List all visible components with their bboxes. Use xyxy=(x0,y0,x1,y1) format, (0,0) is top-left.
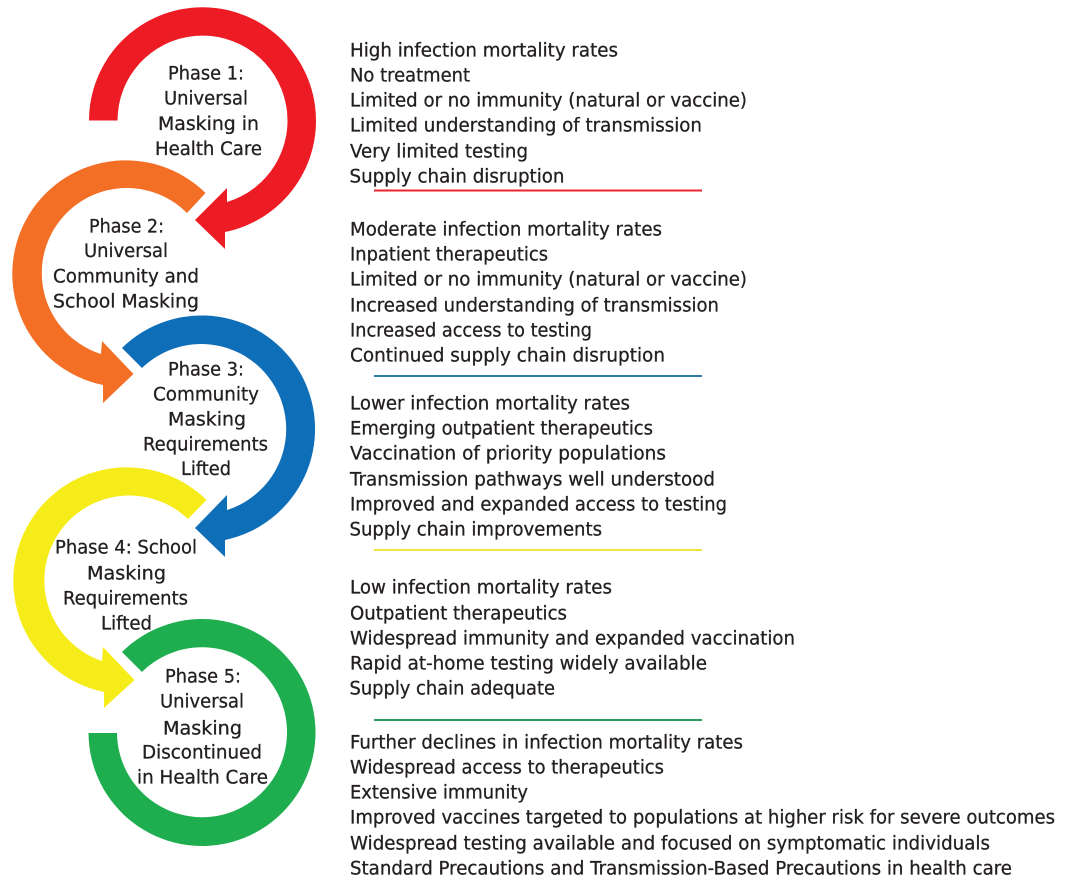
text block: phase 1 conditions xyxy=(350,40,747,187)
text block: phase 3 conditions: Lower infection mortality rates xyxy=(350,393,630,414)
text block: phase 3 conditions: Transmission pathways well understood xyxy=(349,469,715,490)
text block: phase 2 conditions: Increased understanding of transmission xyxy=(350,295,719,316)
label: phase 3: Masking xyxy=(168,409,246,430)
text block: phase 4 conditions: Outpatient therapeutics xyxy=(350,603,567,624)
label: phase 5: in Health Care xyxy=(137,767,268,788)
text block: phase 5 conditions: Further declines in infection mortality rates xyxy=(350,732,743,753)
label: phase 2: Community and xyxy=(53,266,199,287)
arrow: phase 2 orange xyxy=(12,160,206,403)
label: phase 4: Masking xyxy=(87,563,166,584)
label: phase 3 xyxy=(143,359,268,480)
text block: phase 5 conditions: Widespread testing available and focused on symptomatic individuals xyxy=(350,833,990,854)
label: phase 5 xyxy=(137,666,268,788)
text block: phase 2 conditions xyxy=(350,219,747,366)
label: phase 1: Phase 1: xyxy=(168,63,244,84)
text block: phase 3 conditions: Vaccination of priority populations xyxy=(350,443,666,464)
label: phase 5: Discontinued xyxy=(142,742,262,763)
text block: phase 3 conditions: Supply chain improvements xyxy=(350,519,602,540)
label: phase 2: School Masking xyxy=(53,291,199,312)
label: phase 2: Universal xyxy=(84,241,168,262)
label: phase 1: Health Care xyxy=(155,139,262,160)
text block: phase 3 conditions xyxy=(349,393,727,540)
label: phase 3: Lifted xyxy=(181,459,231,480)
text block: phase 5 conditions xyxy=(350,732,1055,879)
label: phase 5: Universal xyxy=(160,691,244,712)
text block: phase 1 conditions: Limited understanding of transmission xyxy=(350,115,702,136)
text block: phase 2 conditions: Limited or no immunity (natural or vaccine) xyxy=(350,269,747,290)
label: phase 1 xyxy=(155,63,262,160)
label: phase 4: Requirements xyxy=(63,588,188,609)
label: phase 4: Lifted xyxy=(101,613,152,634)
label: phase 5: Phase 5: xyxy=(165,666,241,687)
label: phase 1: Universal xyxy=(164,88,248,109)
label: phase 1: Masking in xyxy=(158,114,259,135)
label: phase 2 xyxy=(53,216,199,312)
label: phase 2: Phase 2: xyxy=(89,216,164,237)
label: phase 3: Phase 3: xyxy=(168,359,244,380)
text block: phase 5 conditions: Widespread access to therapeutics xyxy=(350,757,664,778)
label: phase 3: Community xyxy=(153,384,259,405)
text block: phase 2 conditions: Moderate infection mortality rates xyxy=(350,219,662,240)
text block: phase 2 conditions: Inpatient therapeutics xyxy=(350,244,548,265)
text block: phase 1 conditions: No treatment xyxy=(350,65,470,86)
text block: phase 1 conditions: Supply chain disruption xyxy=(350,166,564,187)
text block: phase 1 conditions: Limited or no immunity (natural or vaccine) xyxy=(350,90,747,111)
text block: phase 4 conditions xyxy=(350,577,795,699)
text block: phase 5 conditions: Improved vaccines targeted to populations at higher risk for severe outcomes xyxy=(350,807,1055,828)
ring: phase 5 green xyxy=(88,619,315,846)
text block: phase 3 conditions: Emerging outpatient therapeutics xyxy=(350,418,653,439)
arrow: phase 3 blue xyxy=(122,315,315,557)
text block: phase 4 conditions: Widespread immunity and expanded vaccination xyxy=(350,628,795,649)
text block: phase 4 conditions: Supply chain adequate xyxy=(350,678,555,699)
text block: phase 5 conditions: Extensive immunity xyxy=(350,782,528,803)
text block: phase 4 conditions: Low infection mortality rates xyxy=(350,577,612,598)
text block: phase 1 conditions: Very limited testing xyxy=(350,141,528,162)
arrow: phase 4 yellow xyxy=(13,467,206,708)
text block: phase 3 conditions: Improved and expanded access to testing xyxy=(350,494,727,515)
text block: phase 2 conditions: Continued supply chain disruption xyxy=(350,345,665,366)
label: phase 5: Masking xyxy=(163,718,242,739)
label: phase 4 xyxy=(55,537,197,634)
label: phase 3: Requirements xyxy=(143,434,268,455)
label: phase 4: Phase 4: School xyxy=(55,537,197,558)
arrow: phase 1 red xyxy=(89,7,316,249)
text block: phase 5 conditions: Standard Precautions and Transmission-Based Precautions in health care xyxy=(350,858,1012,879)
text block: phase 1 conditions: High infection mortality rates xyxy=(350,40,618,61)
text block: phase 2 conditions: Increased access to testing xyxy=(350,320,592,341)
text block: phase 4 conditions: Rapid at-home testing widely available xyxy=(350,653,707,674)
